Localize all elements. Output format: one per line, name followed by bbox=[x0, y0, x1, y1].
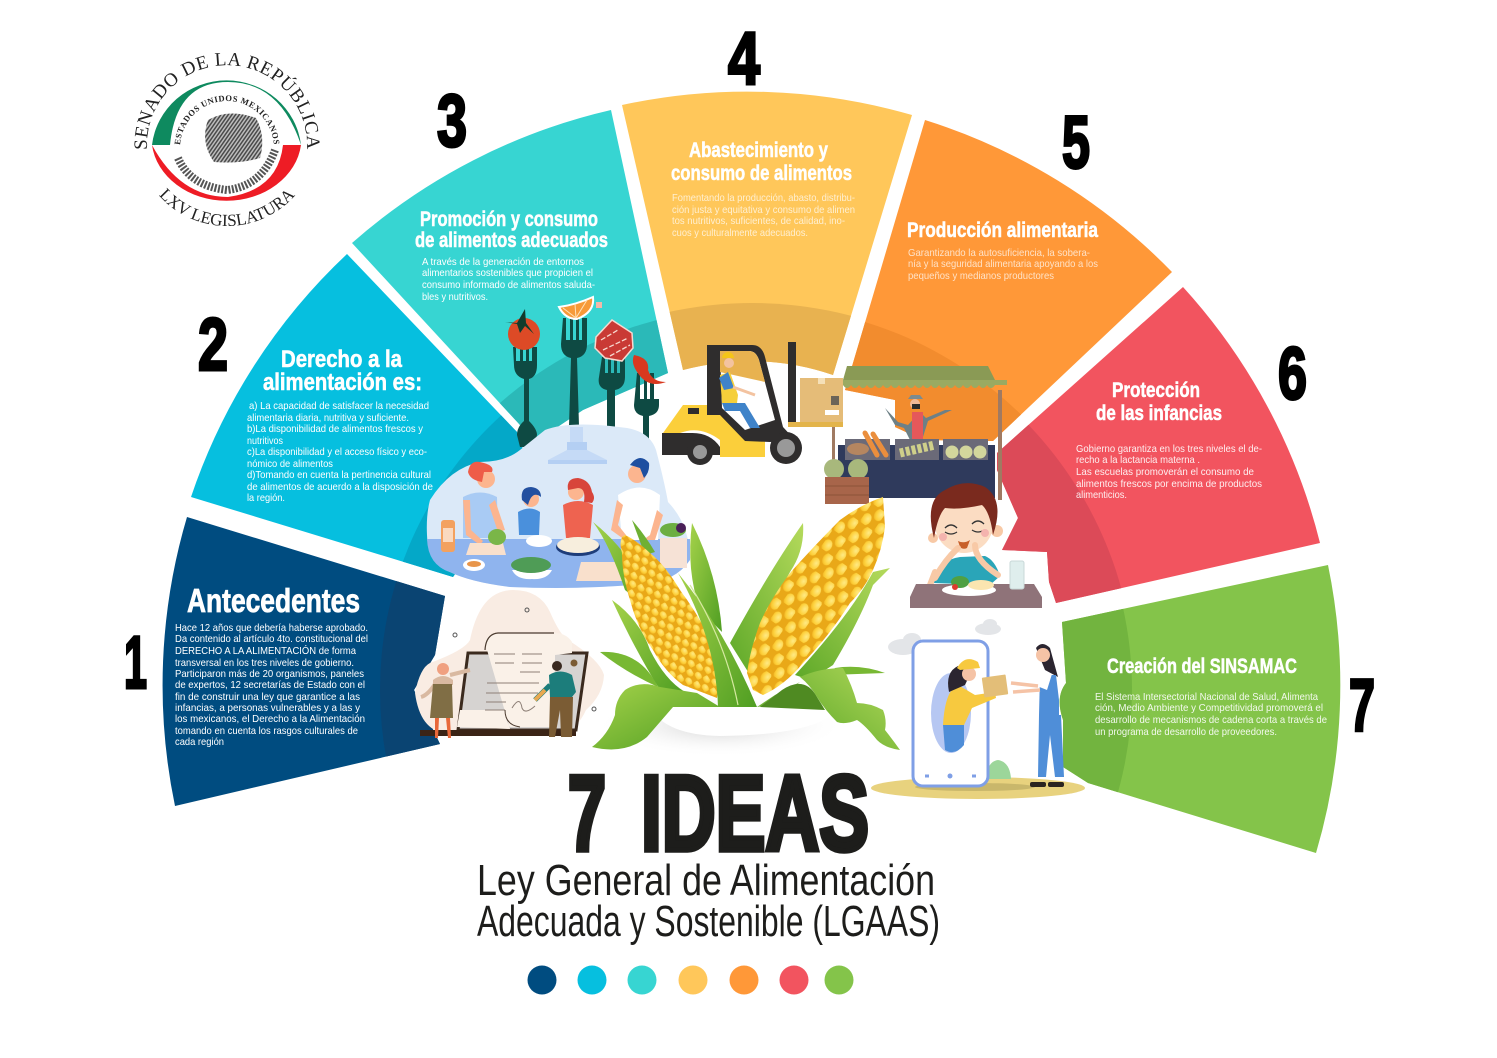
text block: Derecho body: b)La disponibilidad de alimentos frescos y bbox=[247, 423, 424, 435]
number 2: 2 bbox=[198, 303, 228, 386]
bush bbox=[988, 760, 1011, 779]
table items bbox=[441, 520, 687, 581]
heading: Derecho a la alimentación es bbox=[263, 346, 422, 396]
text block: Derecho body: nutritivos bbox=[247, 435, 283, 447]
child bbox=[518, 487, 541, 535]
text block: Promoción body: alimentarios sostenibles que propicien el bbox=[422, 267, 593, 279]
clouds bbox=[888, 619, 1001, 655]
paper with signature bbox=[457, 633, 572, 729]
milk glass bbox=[1010, 561, 1024, 589]
heading: Abastecimiento y consumo de alimentos: consumo de alimentos bbox=[671, 162, 852, 185]
text block: Promoción body bbox=[422, 256, 595, 303]
panel 2: Derecho a la alimentación bbox=[191, 254, 522, 577]
text block: Derecho body bbox=[247, 400, 433, 504]
panel 7: Creación del SINSAMAC bbox=[1060, 565, 1340, 853]
text block: Promoción body: A través de la generación de entornos bbox=[422, 256, 584, 268]
seal wreath and eagle bbox=[178, 113, 275, 190]
panel 3: Promoción y consumo bbox=[352, 110, 668, 437]
girl bbox=[563, 478, 594, 538]
subtitle: Ley General: Ley General de Alimentación bbox=[477, 856, 935, 905]
man signing bbox=[535, 660, 578, 737]
text block: SINSAMAC body bbox=[1095, 691, 1327, 738]
forklift driver bbox=[719, 352, 760, 428]
text block: Derecho body: d)Tomando en cuenta la pertinencia cultural bbox=[247, 469, 431, 481]
illustration: market stall bbox=[824, 366, 1007, 504]
text block: Promoción body: bles y nutritivos. bbox=[422, 291, 488, 303]
number 5: 5 bbox=[1062, 101, 1090, 184]
number 4: 4 bbox=[728, 17, 760, 100]
courier bbox=[943, 659, 1008, 752]
subtitle: Ley General: Adecuada y Sostenible (LGAAS) bbox=[477, 897, 940, 946]
heading: Abastecimiento y consumo de alimentos bbox=[671, 139, 852, 185]
father bbox=[611, 458, 663, 540]
boy head bbox=[928, 483, 1003, 553]
illustration: delivery bbox=[871, 619, 1085, 799]
corn back leaves bbox=[593, 520, 885, 692]
vegetable crate bbox=[824, 459, 869, 504]
text block: Antecedentes body: Participaron más de 20 organismos, paneles bbox=[175, 668, 364, 680]
text block: Antecedentes body: DERECHO A LA ALIMENTACIÓN de forma bbox=[175, 644, 356, 657]
panel 5: Producción alimentaria bbox=[845, 120, 1172, 441]
text block: SINSAMAC body: ción, Medio Ambiente y Competitividad promoverá el bbox=[1095, 702, 1323, 714]
heading: Antecedentes: Antecedentes bbox=[187, 582, 360, 619]
text block: Antecedentes body: los mexicanos, el Derecho a la Alimentación bbox=[175, 713, 365, 725]
text block: Producción body bbox=[908, 247, 1098, 282]
text block: Antecedentes body: Hace 12 años que debería haberse aprobado. bbox=[175, 622, 368, 634]
number 6: 6 bbox=[1278, 332, 1307, 415]
table with plate bbox=[910, 576, 1042, 608]
forklift body bbox=[663, 405, 765, 457]
text block: Promoción body: consumo informado de alimentos saluda- bbox=[422, 279, 595, 291]
text block: Antecedentes body: transversal en los tres niveles de gobierno. bbox=[175, 657, 354, 669]
cargo box bbox=[788, 378, 843, 427]
text block: Abastecimiento body: Fomentando la producción, abasto, distribu- bbox=[672, 192, 855, 204]
panel 6: Protección de las infancias bbox=[997, 287, 1320, 603]
text block: Antecedentes body: Da contenido al artículo 4to. constitucional del bbox=[175, 633, 368, 645]
orange slice bbox=[559, 297, 602, 319]
title: 7 IDEAS: IDEAS bbox=[641, 753, 869, 873]
text block: SINSAMAC body: desarrollo de mecanismos de cadena corta a través de bbox=[1095, 714, 1327, 726]
woman presenting bbox=[421, 663, 470, 738]
heading: Protección de las infancias: de las infancias bbox=[1096, 402, 1222, 425]
text block: Abastecimiento body bbox=[672, 192, 855, 239]
text block: Abastecimiento body: cuos y culturalmente adecuados. bbox=[672, 227, 808, 239]
cooker hood bbox=[548, 427, 607, 464]
heading: Abastecimiento y consumo de alimentos: Abastecimiento y bbox=[689, 139, 828, 162]
forklift mast bbox=[788, 342, 796, 425]
logo text: LXV Legislatura: LXV LEGISLATURA bbox=[159, 188, 296, 226]
text block: Derecho body: nómico de alimentos bbox=[247, 458, 333, 470]
stall vendor bbox=[885, 395, 952, 440]
stall table bbox=[838, 445, 995, 498]
illustration: boy eating bbox=[910, 483, 1042, 608]
text block: SINSAMAC body: un programa de desarrollo de proveedores. bbox=[1095, 726, 1277, 738]
illustration: forks with food bbox=[505, 297, 666, 447]
panel 4: Abastecimiento bbox=[622, 92, 912, 375]
number 7: 7 bbox=[1349, 664, 1375, 747]
text block: Antecedentes body: tomando en cuenta los rasgos culturales de bbox=[175, 725, 358, 737]
heading: Promoción y consumo de alimentos adecuados: Promoción y consumo bbox=[420, 208, 598, 231]
ground bbox=[871, 777, 1085, 799]
stall produce bbox=[845, 433, 988, 460]
logo green arc bbox=[152, 80, 301, 145]
text block: Derecho body: de alimentos de acuerdo a la disposición de bbox=[247, 481, 433, 493]
heading: Producción alimentaria: Producción alimentaria bbox=[907, 219, 1098, 242]
panel 1: Antecedentes bbox=[162, 517, 445, 806]
illustration: document signing bbox=[415, 590, 604, 738]
text block: Abastecimiento body: tos nutritivos, suficientes, de calidad, ino- bbox=[672, 215, 845, 227]
text block: Protección body: alimentos frescos por encima de productos bbox=[1076, 478, 1262, 490]
logo: Senado de la República bbox=[134, 53, 320, 226]
chili bbox=[633, 355, 666, 384]
subtitle: Ley General bbox=[477, 856, 940, 946]
text block: Protección body: recho a la lactancia materna . bbox=[1076, 454, 1200, 466]
heading: Derecho a la alimentación es: Derecho a la bbox=[281, 346, 403, 373]
stall poles bbox=[832, 390, 1002, 500]
text block: Protección body: alimenticios. bbox=[1076, 489, 1127, 501]
text block: Derecho body: a) La capacidad de satisfacer la necesidad bbox=[249, 400, 429, 412]
tomato bbox=[505, 309, 540, 350]
text block: Producción body: nía y la seguridad alimentaria apoyando a los bbox=[908, 258, 1098, 270]
number 3: 3 bbox=[437, 79, 467, 162]
corn front leaves bbox=[592, 568, 900, 750]
title: 7 IDEAS: 7 bbox=[568, 753, 606, 873]
mother bbox=[463, 462, 505, 545]
text block: SINSAMAC body: El Sistema Intersectorial Nacional de Salud, Alimenta bbox=[1095, 691, 1318, 703]
text block: Abastecimiento body: ción justa y equitativa y consumo de alimen bbox=[672, 204, 855, 216]
text block: Antecedentes body: de expertos, 12 secretarías de Estado con el bbox=[175, 679, 365, 691]
legend dots bbox=[528, 966, 854, 994]
stall awning bbox=[843, 366, 1007, 388]
logo text: Senado de la República: SENADO DE LA REPÚBLICA bbox=[134, 53, 320, 150]
text block: Protección body bbox=[1076, 443, 1262, 501]
heading: Derecho a la alimentación es: alimentación es: bbox=[263, 369, 422, 396]
heading: Creación del SINSAMAC: Creación del SINSAMAC bbox=[1107, 655, 1297, 678]
heading: Protección de las infancias bbox=[1096, 379, 1222, 425]
phone bbox=[913, 641, 988, 786]
illustration: family cooking bbox=[427, 424, 690, 588]
boy shirt bbox=[933, 556, 1000, 585]
illustration: forklift bbox=[662, 342, 843, 465]
text block: Derecho body: alimentaria diaria, nutritiva y suficiente. bbox=[247, 412, 409, 424]
text block: Antecedentes body: fin de construir una ley que garantice a las bbox=[175, 691, 360, 703]
corn ear left bbox=[621, 535, 718, 698]
text block: Protección body: Las escuelas promoverán el consumo de bbox=[1076, 466, 1254, 478]
corn plate shadow bbox=[595, 693, 845, 757]
text block: Protección body: Gobierno garantiza en los tres niveles el de- bbox=[1076, 443, 1262, 455]
logo red arc bbox=[152, 145, 301, 201]
text block: Producción body: pequeños y medianos productores bbox=[908, 270, 1054, 282]
customer bbox=[1011, 644, 1064, 787]
meat bbox=[595, 320, 633, 361]
heading: Protección de las infancias: Protección bbox=[1112, 379, 1200, 402]
corn ear right bbox=[747, 497, 885, 695]
boy arm bbox=[930, 545, 998, 585]
illustration: corn bbox=[592, 497, 900, 757]
text block: Antecedentes body: infancias, a personas vulnerables y a las y bbox=[175, 702, 361, 714]
heading: Promoción y consumo de alimentos adecuados: de alimentos adecuados bbox=[415, 229, 608, 252]
text block: Producción body: Garantizando la autosuficiencia, la sobera- bbox=[908, 247, 1090, 259]
number 1: 1 bbox=[124, 621, 147, 704]
heading: Promoción y consumo de alimentos adecuados bbox=[415, 208, 608, 252]
text block: Antecedentes body bbox=[175, 622, 368, 748]
logo text: Estados Unidos Mexicanos: ESTADOS UNIDOS MEXICANOS bbox=[174, 95, 280, 145]
text block: Derecho body: la región. bbox=[247, 492, 285, 504]
title: 7 IDEAS bbox=[568, 753, 869, 873]
laptop bbox=[458, 653, 587, 730]
text block: Derecho body: c)La disponibilidad y el acceso físico y eco- bbox=[247, 446, 427, 458]
text block: Antecedentes body: cada región bbox=[175, 736, 224, 748]
forklift wheels bbox=[687, 432, 802, 465]
